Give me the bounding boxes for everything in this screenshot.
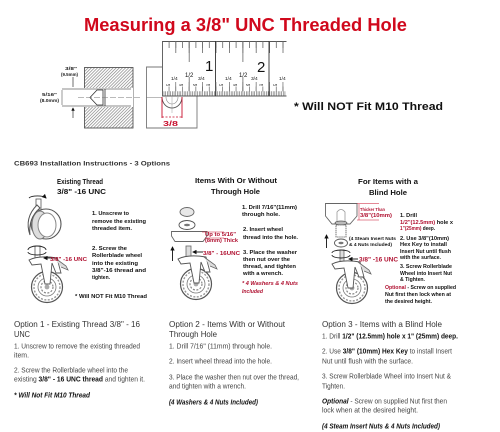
text block: option 3 <box>322 320 458 430</box>
steps: 1. Unscrew to <box>92 211 130 217</box>
red labels <box>202 232 240 257</box>
red labels: Up to 5/16" <box>205 232 236 238</box>
steps: 3. Screw Rollerblade <box>400 264 452 270</box>
included note: & 4 Nuts Included) <box>349 242 392 248</box>
icon: spherical wheel <box>28 196 61 239</box>
heading <box>57 177 107 196</box>
ruler numbers: 3/8 <box>179 83 184 87</box>
icon: mounting plate <box>172 232 207 242</box>
steps: * Will NOT Fit M10 Thread <box>75 294 147 300</box>
steps <box>75 211 147 300</box>
icon: block with blind hole <box>326 204 357 224</box>
ruler numbers: 2 <box>257 59 265 76</box>
red thread label: 3/8" -16 UNC <box>50 257 87 263</box>
steps <box>242 205 299 295</box>
ruler numbers: 1/8 <box>273 83 278 87</box>
steps: & Tighten. <box>400 277 425 283</box>
ruler numbers: 1/8 <box>166 83 171 87</box>
steps: 3/8"-16 thread and <box>92 268 146 274</box>
heading: Through Hole <box>211 187 260 196</box>
red labels: 3/8"(10mm) <box>360 213 392 219</box>
warning note: * Will NOT Fit M10 Thread <box>294 101 443 113</box>
ruler numbers: 3/4 <box>198 76 205 82</box>
steps: Rollerblade wheel <box>92 253 143 259</box>
steps: threaded item. <box>92 226 133 232</box>
steps: remove the existing <box>92 219 146 225</box>
text block: option 3: Tighten. <box>322 384 345 390</box>
heading: Items With Or Without <box>195 176 277 185</box>
steps: the desired height. <box>385 299 432 305</box>
ruler numbers: 1/2 <box>239 73 248 79</box>
heading <box>195 176 277 196</box>
red dimension 3/8 <box>162 97 182 128</box>
heading <box>358 177 419 197</box>
ruler numbers: 1/4 <box>171 76 178 82</box>
ruler numbers: 1/4 <box>225 76 232 82</box>
included note: (4 Steam Insert Nuts <box>349 236 396 242</box>
steps: 1/2"(12.5mm) hole x <box>400 220 453 226</box>
label: 8.0mm: (8.0mm) <box>40 98 60 103</box>
steps: Optional - Screw on supplied <box>385 285 456 291</box>
steps: Insert Nut until flush <box>400 249 451 255</box>
icon: up arrow <box>326 235 328 248</box>
text block: option 1: UNC <box>14 330 30 339</box>
text block: option 2: Option 2 - Items With or Without <box>169 320 286 329</box>
ruler numbers: 1/2 <box>185 73 194 79</box>
steps: Included <box>242 289 264 295</box>
ruler numbers <box>166 58 286 87</box>
text block: option 1: item. <box>14 352 29 360</box>
steps: then nut over the <box>243 257 290 263</box>
red labels: Thicker Than <box>360 207 385 213</box>
text block: option 2: (4 Washers & 4 Nuts Included) <box>169 400 259 406</box>
text block: option 3: Nut until flush with the surface. <box>322 358 413 366</box>
text block: option 2: 2. Insert wheel thread into the hole. <box>169 358 272 366</box>
panel: through hole <box>172 176 299 300</box>
section heading: CB693 Installation Instructions - 3 Options <box>14 160 170 168</box>
red labels: 3/8" - 16UNC <box>203 251 240 257</box>
icon: caster wheel <box>332 250 371 304</box>
ruler numbers: 1 <box>205 58 213 75</box>
text block: option 3: lock when at the desired height. <box>322 408 418 414</box>
text block: option 1: 2. Screw the Rollerblade wheel into the <box>14 368 128 374</box>
steps: 2. Screw the <box>92 246 127 252</box>
red dimension 3/8: 3/8 <box>163 119 178 128</box>
heading: Existing Thread <box>57 177 103 186</box>
icon: nut <box>180 208 194 216</box>
text block: option 1: Option 1 - Existing Thread 3/8" - 16 <box>14 320 141 329</box>
ruler numbers: 1/4 <box>279 76 286 82</box>
label: 9.5mm: (9.5mm) <box>61 72 79 77</box>
steps: tighten. <box>92 275 110 281</box>
text block: option 3: 3. Screw Rollerblade Wheel into Insert Nut & <box>322 374 451 380</box>
text block: option 3: (4 Steam Insert Nuts & 4 Nuts Included) <box>322 424 441 430</box>
diagram: tape measure over hole <box>146 41 286 128</box>
text block: option 3: 2. Use 3/8" (10mm) Hex Key to install Insert <box>322 348 452 356</box>
included note <box>349 236 396 248</box>
steps: into the existing <box>92 261 138 267</box>
text block: option 3: Optional - Screw on supplied Nut first then <box>322 398 447 406</box>
steps: Hex Key to install <box>400 242 448 248</box>
ruler numbers: 7/8 <box>259 83 264 87</box>
panel: blind hole <box>326 177 456 305</box>
text block: option 2: 3. Place the washer then nut over the thread, <box>169 374 299 382</box>
label: 3/8 inch: 3/8" <box>65 66 77 72</box>
ruler numbers: 3/8 <box>233 83 238 87</box>
text block: option 1 <box>14 320 145 400</box>
steps: thread into the hole. <box>243 235 299 241</box>
steps: thread, and tighten <box>243 264 296 270</box>
ruler numbers: 5/8 <box>246 83 251 87</box>
steps: 1. Drill 7/16"(11mm) <box>242 205 297 211</box>
text block: option 2: 1. Drill 7/16" (11mm) through hole. <box>169 344 272 350</box>
steps: 1. Drill <box>400 213 418 219</box>
ruler numbers: 5/8 <box>193 83 198 87</box>
heading: Blind Hole <box>369 188 407 197</box>
text block: option 2 <box>169 320 299 406</box>
text block: option 2: Through Hole <box>169 330 218 339</box>
red labels: 3/8" -16 UNC <box>359 258 399 264</box>
label: 5/16 inch: 5/16" <box>42 92 57 98</box>
diagram: threaded hole cross-section <box>40 66 142 128</box>
steps: with a wrench. <box>242 271 284 277</box>
steps: 1"(25mm) deep. <box>400 226 435 232</box>
text block: option 2: and tighten with a wrench. <box>169 384 246 390</box>
icon: caster wheel <box>178 246 217 300</box>
panel: existing thread <box>28 177 147 302</box>
icon: up arrow <box>172 247 174 261</box>
icon: washer <box>179 220 195 230</box>
ruler numbers: 3/4 <box>251 76 258 82</box>
steps: 2. Use 3/8"(10mm) <box>400 236 449 242</box>
steps: 2. Insert wheel <box>243 227 284 233</box>
text block: option 1: 1. Unscrew to remove the existing threaded <box>14 344 140 350</box>
text block: option 1: existing 3/8" - 16 UNC thread and tighten it. <box>14 376 145 384</box>
icon: caster wheel <box>28 246 68 302</box>
heading: For Items with a <box>358 177 419 186</box>
text block: option 3: 1. Drill 1/2" (12.5mm) hole x 1" (25mm) deep. <box>322 334 458 340</box>
heading: 3/8" -16 UNC <box>57 187 107 196</box>
red labels: (8mm) Thick <box>205 238 238 244</box>
steps: through hole. <box>242 212 281 218</box>
ruler numbers: 7/8 <box>206 83 211 87</box>
red labels <box>357 204 399 264</box>
title: Measuring a 3/8" UNC Threaded Hole <box>84 15 407 35</box>
text block: option 1: * Will Not Fit M10 Thread <box>14 392 91 400</box>
ruler numbers: 1/8 <box>219 83 224 87</box>
steps: Nut first then lock when at <box>385 292 451 298</box>
steps: * 4 Washers & 4 Nuts <box>242 281 298 287</box>
ruler ticks <box>162 41 286 96</box>
text block: option 3: Option 3 - Items with a Blind Hole <box>322 320 443 329</box>
steps: 3. Place the washer <box>243 250 298 256</box>
steps: Wheel into Insert Nut <box>400 271 452 277</box>
steps <box>385 213 456 305</box>
steps: with the surface. <box>399 255 441 261</box>
icon: insert nut and washer <box>334 221 348 247</box>
